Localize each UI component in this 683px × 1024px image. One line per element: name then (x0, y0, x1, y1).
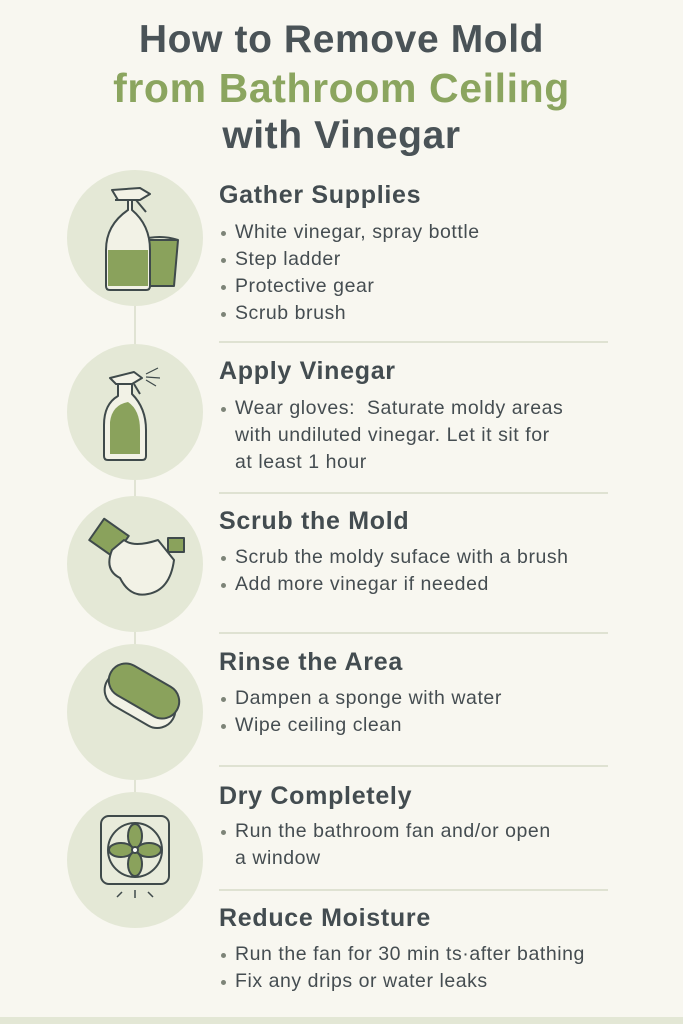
title (113, 18, 570, 157)
section 5 bullets (221, 820, 551, 869)
icon: spray bottle (104, 368, 160, 460)
section 3 bullets (221, 546, 569, 595)
icon: fan (101, 816, 169, 898)
title: from Bathroom Ceiling (113, 65, 570, 111)
section 5 heading: Dry Completely (219, 782, 412, 810)
section 1 heading: Gather Supplies (219, 181, 421, 209)
section 1 bullets (221, 221, 480, 324)
section 1 bullets: Step ladder (235, 248, 341, 270)
section 1 bullets: Protective gear (235, 275, 374, 297)
section 2 bullets (221, 397, 563, 473)
section 2 bullets: Wear gloves: Saturate moldy areas (235, 397, 563, 419)
section 6 bullets (221, 943, 585, 992)
section 1 bullets: Scrub brush (235, 302, 346, 324)
circle 5 (67, 792, 203, 928)
section 3 heading: Scrub the Mold (219, 507, 409, 535)
section 6 bullets: Run the fan for 30 min ts·after bathing (235, 943, 585, 965)
title: How to Remove Mold (139, 18, 544, 61)
icon: bottle and bucket (106, 188, 178, 290)
section 5 bullets: a window (235, 847, 321, 869)
section 2 heading: Apply Vinegar (219, 357, 396, 385)
section 3 bullets: Scrub the moldy suface with a brush (235, 546, 569, 568)
circle 4 (67, 644, 203, 780)
section 4 heading: Rinse the Area (219, 648, 403, 676)
section 5 bullets: Run the bathroom fan and/or open (235, 820, 551, 842)
section 4 bullets: Wipe ceiling clean (235, 714, 402, 736)
bottom strip (0, 1017, 683, 1024)
section 4 bullets (221, 687, 502, 736)
icon: gloved hand with brush (89, 519, 184, 595)
section 6 heading: Reduce Moisture (219, 904, 431, 932)
circle 2 (67, 344, 203, 480)
section 4 bullets: Dampen a sponge with water (235, 687, 502, 709)
section 6 bullets: Fix any drips or water leaks (235, 970, 488, 992)
circle 3 (67, 496, 203, 632)
connector line (134, 300, 136, 820)
section 1 bullets: White vinegar, spray bottle (235, 221, 480, 243)
section 2 bullets: with undiluted vinegar. Let it sit for (235, 424, 550, 446)
section 2 bullets: at least 1 hour (235, 451, 367, 473)
section 3 bullets: Add more vinegar if needed (235, 573, 489, 595)
circle 1 (67, 170, 203, 306)
title: with Vinegar (222, 114, 461, 157)
icon: sponge (98, 657, 185, 735)
